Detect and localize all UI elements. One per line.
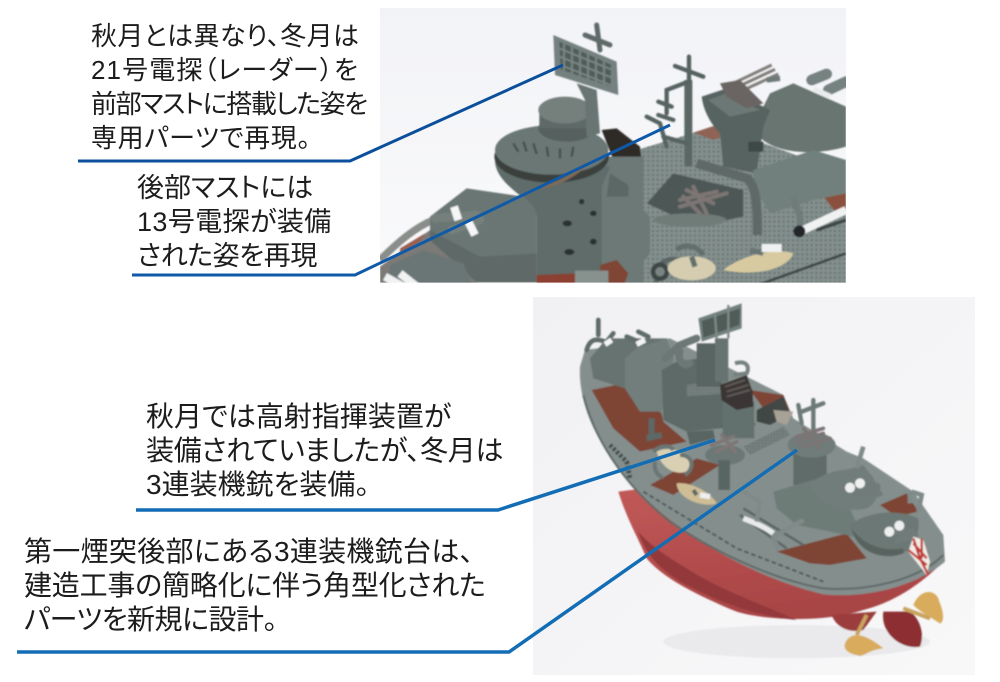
leader line: front radar [78,65,563,161]
text block: front mast radar [91,21,367,153]
text block: gun mount redesign [24,536,486,635]
text block: machine guns: 秋月では高射指揮装置が [146,401,451,432]
leader line: aft mast [132,125,670,275]
leader line: rear funnel gun mount [17,450,797,652]
leader line: triple machine gun [136,440,715,510]
text block: machine guns: 3連装機銃を装備。 [146,469,369,500]
text block: aft mast radar [137,173,332,271]
text block: machine guns [146,401,503,500]
text block: gun mount redesign: 建造工事の簡略化に伴う角型化された [24,570,486,601]
photo: full ship model [533,297,975,675]
photo: aft mast and radar close-up [380,8,846,287]
text block: front mast radar: 21号電探（レーダー）を [91,55,359,85]
text block: gun mount redesign: 第一煙突後部にある3連装機銃台は、 [24,536,474,567]
text block: aft mast radar: された姿を再現 [137,241,317,271]
text block: gun mount redesign: パーツを新規に設計。 [24,604,277,635]
text block: aft mast radar: 後部マストには [137,173,313,203]
text block: aft mast radar: 13号電探が装備 [137,207,332,237]
text block: front mast radar: 秋月とは異なり、冬月は [91,21,359,51]
text block: front mast radar: 専用パーツで再現。 [91,123,311,153]
text block: machine guns: 装備されていましたが、冬月は [146,435,503,466]
text block: front mast radar: 前部マストに搭載した姿を [91,89,367,119]
